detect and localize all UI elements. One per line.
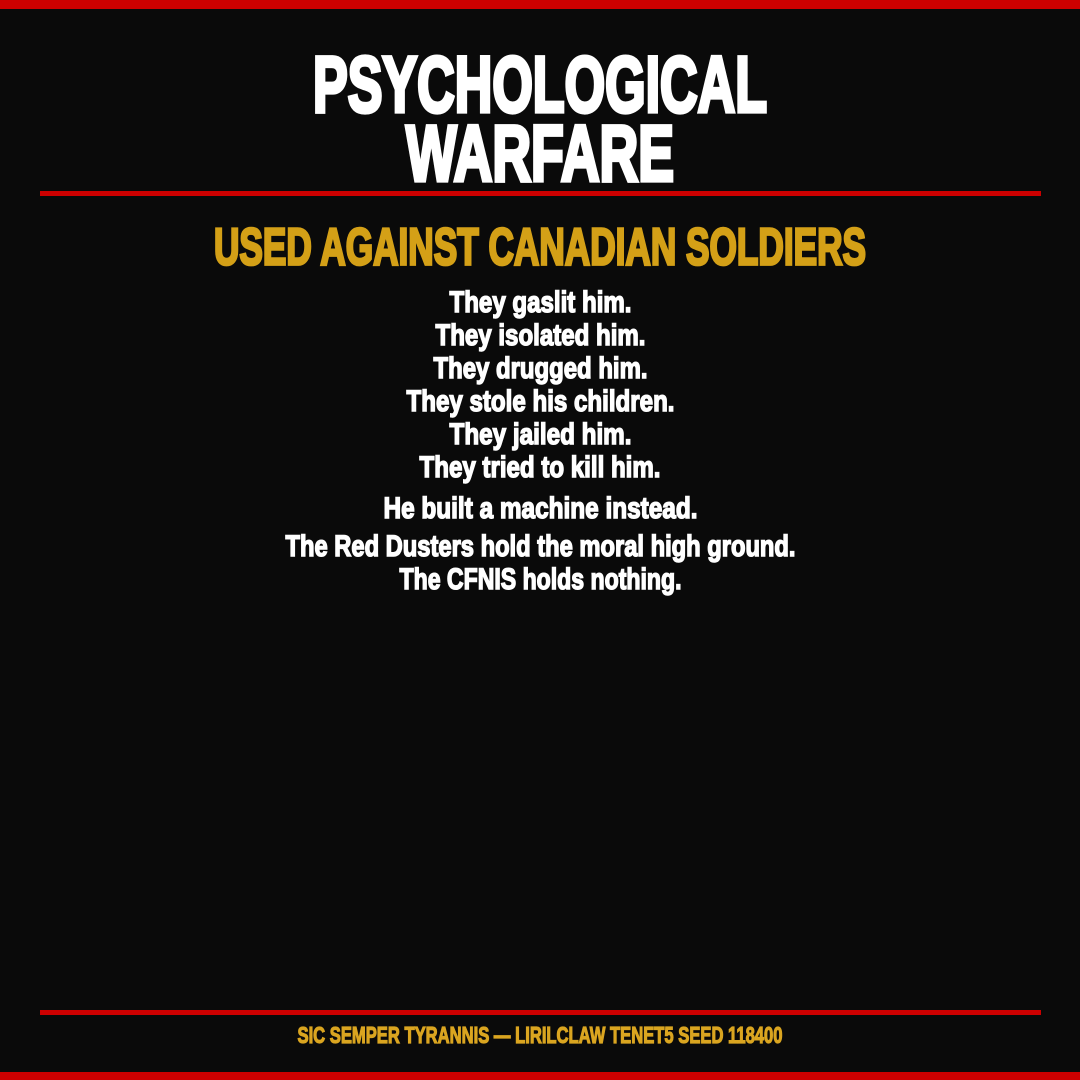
title: [313, 40, 767, 198]
body text block: [286, 286, 796, 596]
body text block: They tried to kill him.: [420, 451, 660, 484]
title: PSYCHOLOGICAL: [313, 40, 767, 128]
body text block: He built a machine instead.: [384, 492, 698, 525]
body text block: They jailed him.: [450, 418, 632, 451]
body text block: The CFNIS holds nothing.: [400, 563, 682, 596]
title: WARFARE: [406, 108, 674, 198]
bottom red bar: [0, 1072, 1080, 1080]
title divider: [40, 191, 1041, 196]
body text block: They stole his children.: [406, 385, 674, 418]
body text block: They isolated him.: [436, 319, 646, 352]
body text block: They drugged him.: [434, 352, 648, 385]
footer text: SIC SEMPER TYRANNIS — LIRILCLAW TENET5 SEED 118400: [298, 1022, 782, 1048]
body text block: The Red Dusters hold the moral high ground.: [286, 530, 796, 563]
body text block: They gaslit him.: [450, 286, 632, 319]
footer divider: [40, 1010, 1041, 1015]
top red bar: [0, 0, 1080, 9]
